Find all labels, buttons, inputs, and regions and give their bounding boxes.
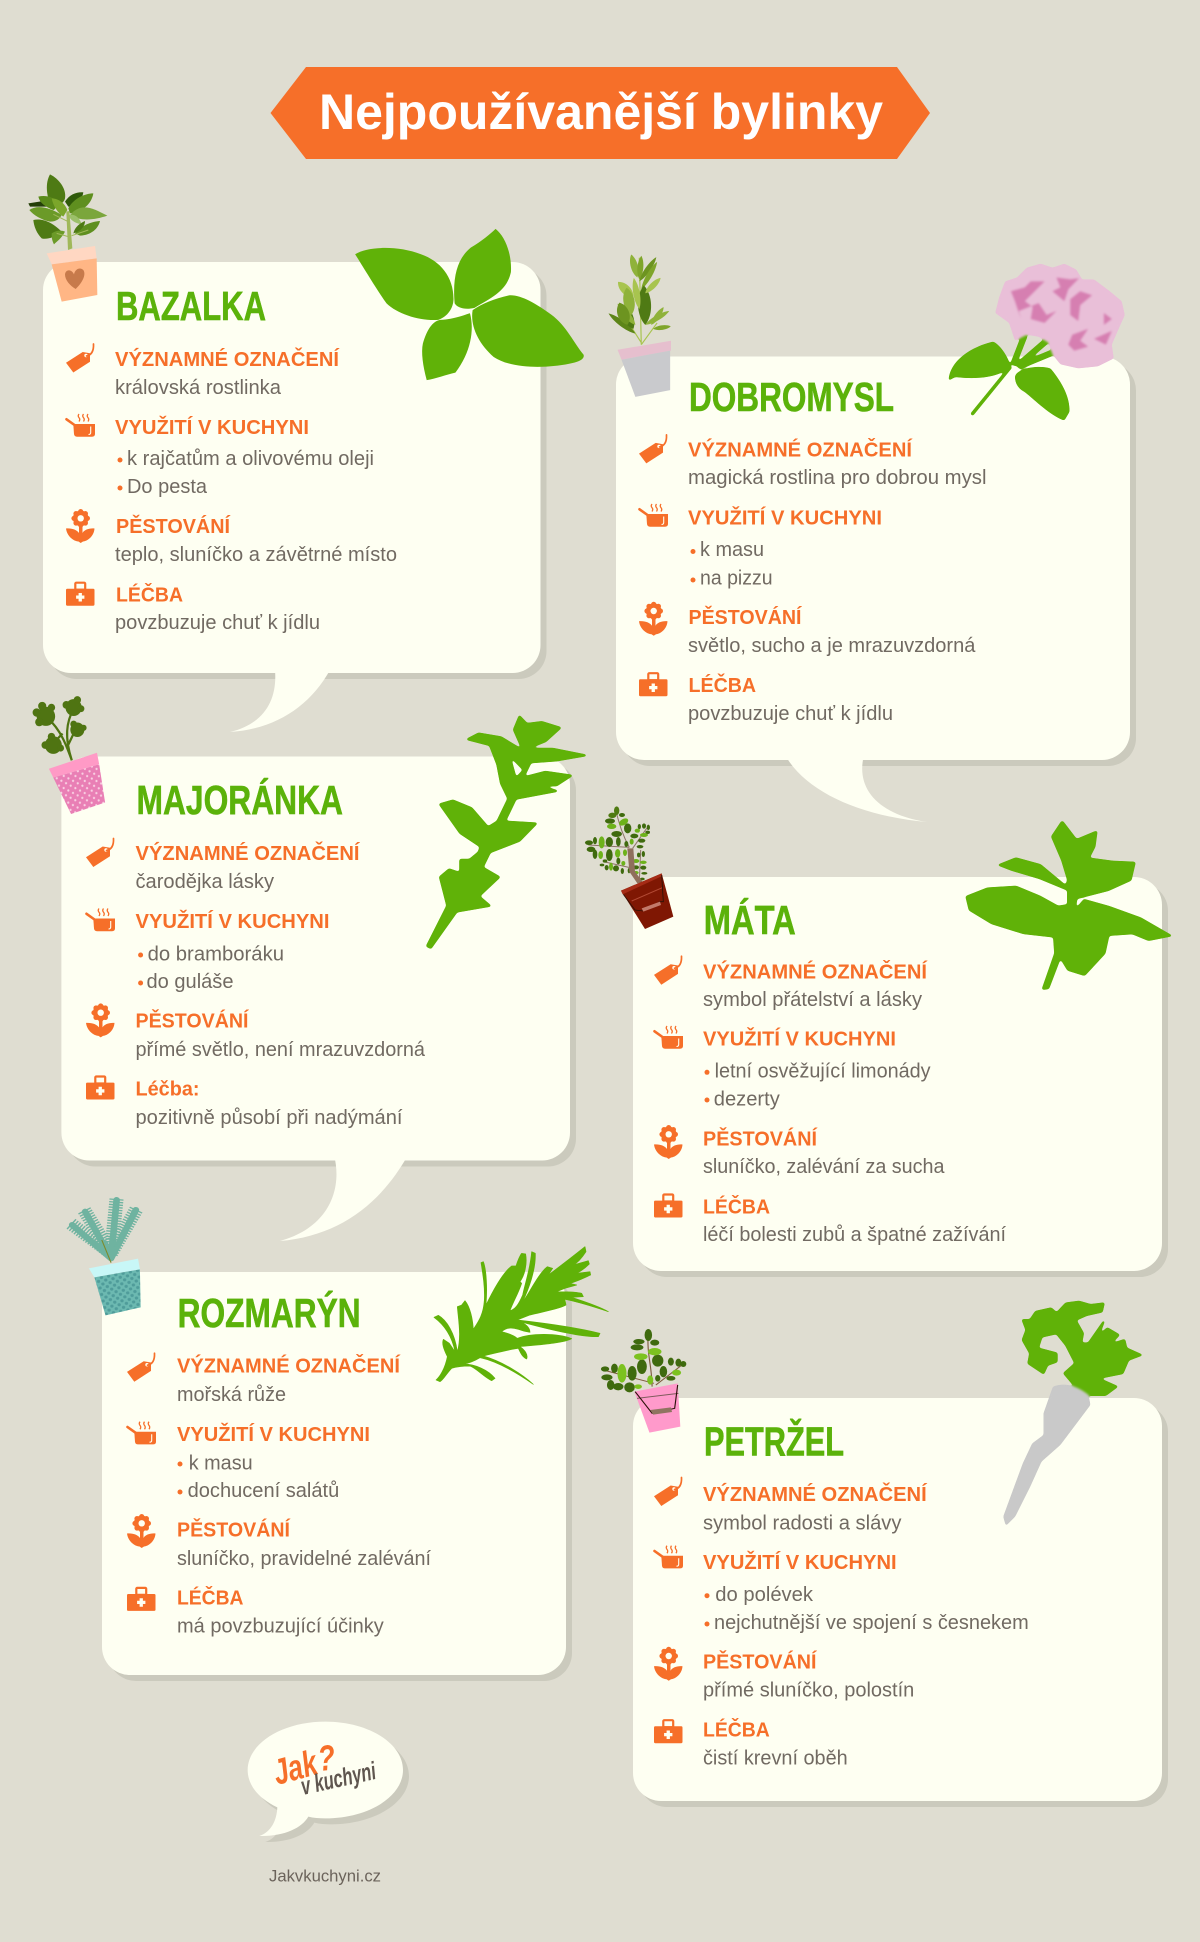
row: význačné označení [654,1478,927,1534]
logo: speech bubble: ? [316,1737,337,1779]
row: pěstování: PĚSTOVÁNÍ [703,1650,817,1674]
row: pěstování [639,602,976,657]
icon: flower [639,602,668,636]
row: význačné označení: symbol přátelství a lásky [703,989,922,1011]
heading: MAJORÁNKA [136,777,343,823]
logo: speech bubble [248,1722,409,1842]
icon: pot [654,1546,683,1568]
row: význačné označení: VÝZNAMNÉ OZNAČENÍ [177,1354,400,1378]
row: využití v kuchyni: nejchutnější ve spojení s česnekem [714,1612,1029,1634]
website address: Jakvkuchyni.cz [269,1868,381,1886]
illustration: potted mint [585,806,673,929]
row: léčba: LÉČBA [688,673,756,697]
panel: Rozmarýn [70,1198,608,1681]
row: léčba: LÉČBA [177,1586,244,1610]
illustration: potted marjoram [33,696,105,814]
row: léčba: LÉČBA [703,1718,770,1742]
row: význačné označení: mořská růže [177,1384,286,1406]
row: pěstování: sluníčko, pravidelné zalévání [177,1548,431,1570]
icon: pot [654,1026,683,1049]
icon: first aid kit [654,1194,682,1218]
illustration: oregano flower [949,264,1125,421]
illustration: potted oregano [607,254,671,397]
row: léčba [66,583,320,634]
illustration: rosemary sprig [434,1247,608,1384]
title banner: Nejpoužívanější bylinky [319,84,883,140]
panel: Máta [585,806,1171,1277]
icon: tag [86,838,114,867]
row: význačné označení: symbol radosti a slávy [703,1512,902,1534]
row: využití v kuchyni [66,414,374,498]
row: léčba [654,1194,1006,1246]
row: pěstování: světlo, sucho a je mrazuvzdorná [688,635,976,657]
icon: flower [127,1514,156,1548]
illustration: potted parsley [601,1329,686,1433]
icon: pot [640,504,668,527]
row: význačné označení [66,344,339,399]
logo: speech bubble: Jak [268,1741,323,1793]
row: léčba: LÉČBA [116,583,183,607]
icon: tag [654,1478,682,1506]
row: léčba: povzbuzuje chuť k jídlu [688,703,893,725]
row: význačné označení: královská rostlinka [115,377,282,399]
icon: pot [66,414,95,437]
panel: Bazalka [28,174,584,732]
row: využití v kuchyni: k masu [189,1452,253,1474]
icon: flower [654,1125,682,1159]
row: pěstování [66,509,397,566]
icon: pot [86,908,115,931]
row: využití v kuchyni: do guláše [146,971,234,993]
row: využití v kuchyni: k rajčatům a olivovému oleji [127,448,374,470]
row: pěstování: teplo, sluníčko a závětrné místo [115,544,397,566]
row: léčba [86,1076,403,1129]
row: pěstování [86,1003,426,1061]
row: léčba: má povzbuzující účinky [177,1616,384,1638]
row: pěstování: přímé světlo, není mrazuvzdorná [136,1039,426,1061]
panel: Dobromysl [607,254,1136,822]
row: léčba: pozitivně působí při nadýmání [136,1107,403,1129]
row: význačné označení: VÝZNAMNÉ OZNAČENÍ [703,959,927,983]
icon: tag [654,956,682,985]
row: význačné označení: magická rostlina pro dobrou mysl [688,467,986,489]
icon: flower [86,1003,114,1037]
icon: tag [66,344,94,372]
row: využití v kuchyni: letní osvěžující limonády [715,1061,931,1083]
row: léčba: léčí bolesti zubů a špatné zažívání [703,1224,1006,1246]
row: význačné označení: VÝZNAMNÉ OZNAČENÍ [688,438,912,462]
illustration: potted basil [28,174,107,302]
row: pěstování: sluníčko, zalévání za sucha [703,1156,945,1178]
row: léčba [127,1586,384,1638]
row: pěstování [654,1125,945,1178]
icon: pot [128,1422,156,1444]
row: využití v kuchyni: VYUŽITÍ V KUCHYNI [136,909,330,933]
row: využití v kuchyni: dezerty [714,1089,780,1111]
illustration: mint leaves [967,822,1171,989]
row: léčba: LÉČBA [703,1194,770,1218]
illustration: basil leaves [355,229,584,380]
row: význačné označení [127,1353,400,1406]
row: využití v kuchyni: dochucení salátů [188,1480,339,1502]
icon: first aid kit [66,583,94,606]
row: využití v kuchyni [654,1026,931,1111]
icon: first aid kit [654,1720,682,1743]
heading: MÁTA [704,897,796,943]
row: pěstování: PĚSTOVÁNÍ [136,1008,249,1032]
row: využití v kuchyni [640,504,882,590]
row: využití v kuchyni: VYUŽITÍ V KUCHYNI [703,1550,897,1574]
illustration: marjoram sprig [427,716,585,948]
row: pěstování: PĚSTOVÁNÍ [688,605,802,629]
row: pěstování [654,1647,914,1702]
row: využití v kuchyni: do bramboráku [148,944,284,966]
row: využití v kuchyni: do polévek [715,1584,814,1606]
row: využití v kuchyni: k masu [700,539,764,561]
icon: tag [127,1353,155,1382]
row: využití v kuchyni: VYUŽITÍ V KUCHYNI [177,1422,370,1446]
panel: Petržel [601,1302,1168,1807]
row: využití v kuchyni: VYUŽITÍ V KUCHYNI [688,506,882,530]
row: využití v kuchyni [654,1546,1029,1634]
icon: flower [66,509,94,543]
row: využití v kuchyni: na pizzu [700,568,773,590]
row: význačné označení: VÝZNAMNÉ OZNAČENÍ [703,1482,927,1506]
row: využití v kuchyni [86,908,330,993]
row: pěstování: přímé sluníčko, polostín [703,1680,914,1702]
panel: Majoránka [33,696,585,1241]
row: význačné označení: čarodějka lásky [136,871,274,893]
illustration: parsley root [1003,1302,1141,1526]
heading: ROZMARÝN [178,1290,361,1336]
row: léčba: čistí krevní oběh [703,1748,848,1770]
row: využití v kuchyni: VYUŽITÍ V KUCHYNI [115,415,309,439]
illustration: potted rosemary [70,1198,141,1315]
title banner [270,67,930,159]
row: význačné označení [654,956,927,1011]
icon: tag [639,435,667,463]
icon: first aid kit [639,673,668,696]
row: pěstování: PĚSTOVÁNÍ [703,1127,817,1151]
row: léčba [639,673,893,725]
row: využití v kuchyni [128,1422,370,1502]
row: pěstování: PĚSTOVÁNÍ [116,514,230,538]
icon: flower [654,1647,682,1681]
heading: BAZALKA [116,283,266,329]
icon: first aid kit [86,1076,114,1100]
row: léčba: Léčba: [136,1079,200,1101]
row: význačné označení [86,838,360,893]
row: léčba [654,1718,848,1770]
row: význačné označení [639,435,986,489]
heading: PETRŽEL [704,1418,844,1464]
row: pěstování: PĚSTOVÁNÍ [177,1518,290,1542]
row: léčba: povzbuzuje chuť k jídlu [115,612,320,634]
row: význačné označení: VÝZNAMNÉ OZNAČENÍ [136,841,360,865]
row: pěstování [127,1514,431,1570]
heading: DOBROMYSL [689,374,894,420]
logo: speech bubble: v kuchyni [298,1757,379,1801]
row: využití v kuchyni: VYUŽITÍ V KUCHYNI [703,1027,896,1051]
row: využití v kuchyni: Do pesta [127,476,208,498]
icon: first aid kit [127,1588,156,1611]
row: význačné označení: VÝZNAMNÉ OZNAČENÍ [115,347,339,371]
